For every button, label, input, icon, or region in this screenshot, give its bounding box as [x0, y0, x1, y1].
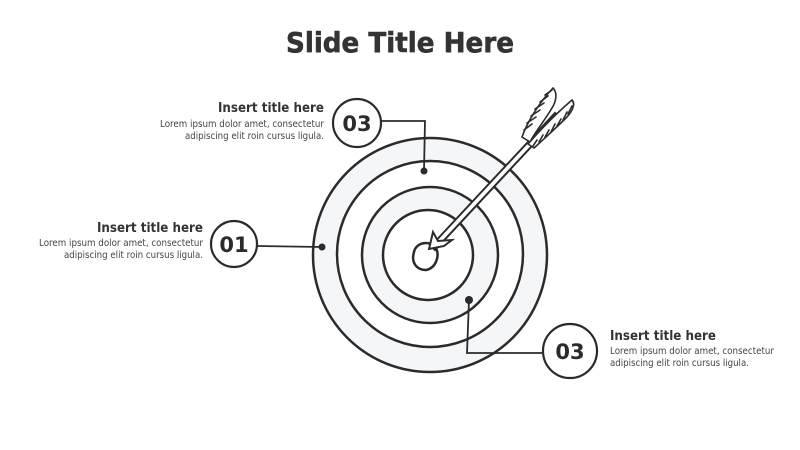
callout: left 01: Insert title here — [97, 221, 203, 236]
arrow — [429, 88, 574, 250]
callout: left 01: Lorem ipsum dolor amet, consectetur — [39, 238, 203, 249]
callout: left 01: adipiscing elit roin cursus ligula. — [64, 250, 203, 261]
callout: bottom 03 — [465, 296, 774, 378]
callout: bottom 03: Lorem ipsum dolor amet, consectetur — [610, 346, 774, 357]
target — [313, 138, 547, 372]
callout: top 03: Insert title here — [218, 101, 324, 116]
callout: bottom 03: 03 — [555, 340, 585, 364]
callout: left 01 — [39, 221, 326, 267]
callout: top 03 — [160, 99, 428, 174]
callout: bottom 03: adipiscing elit roin cursus ligula. — [610, 358, 749, 369]
callout: bottom 03: Insert title here — [610, 329, 716, 344]
callout: left 01: 01 — [219, 233, 249, 257]
callout: top 03: adipiscing elit roin cursus ligula. — [185, 131, 324, 142]
callout: top 03: 03 — [342, 112, 372, 136]
callout: top 03: Lorem ipsum dolor amet, consectetur — [160, 119, 324, 130]
title: Slide Title Here — [286, 26, 514, 59]
